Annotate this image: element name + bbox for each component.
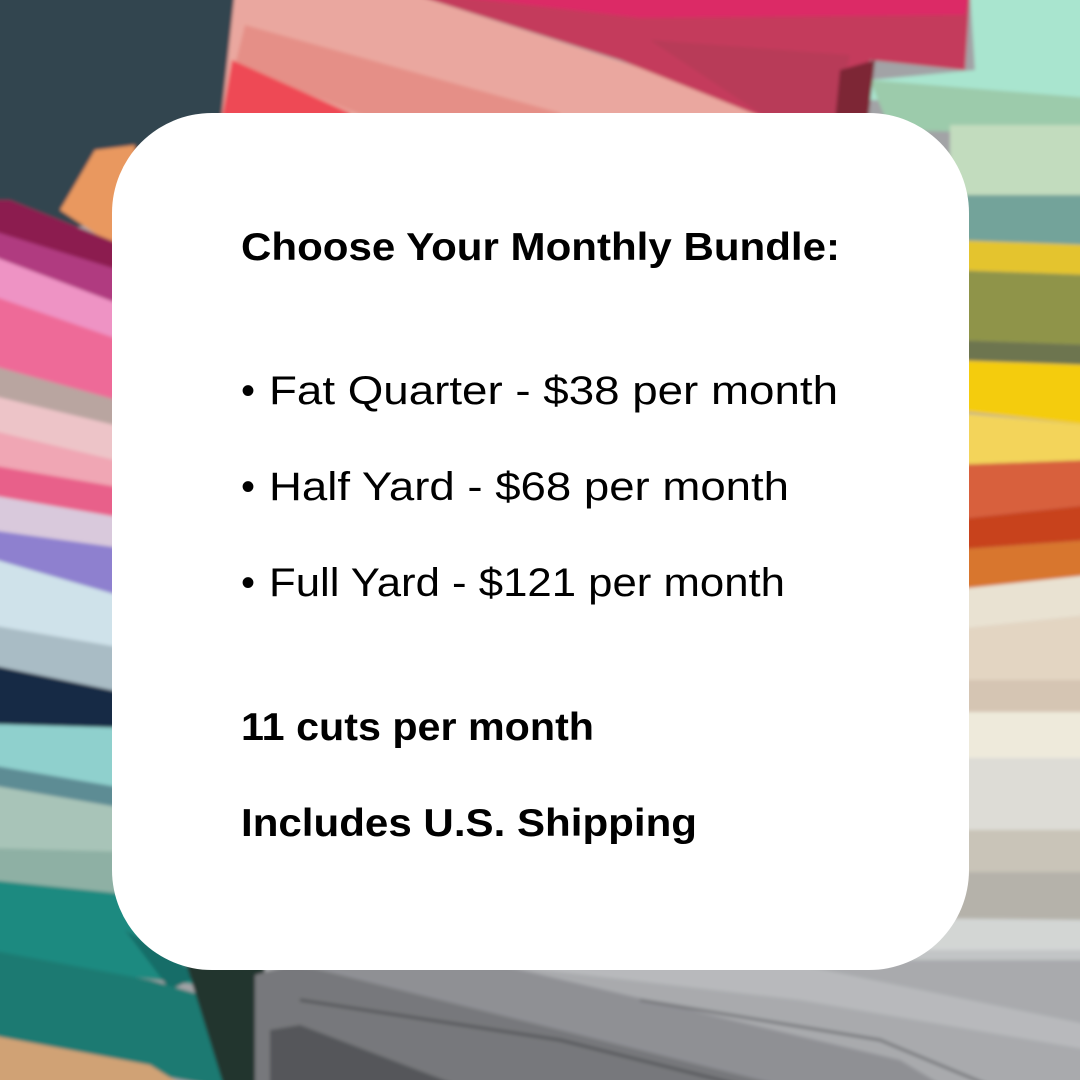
list item: half yard: Half Yard - $68 per month bbox=[269, 465, 789, 509]
heading: Choose Your Monthly Bundle: bbox=[241, 226, 840, 269]
list item: half yard: • bbox=[241, 465, 255, 509]
right bbox=[950, 125, 1080, 200]
list item: fat quarter: Fat Quarter - $38 per month bbox=[269, 369, 838, 413]
cuts per month note: 11 cuts per month bbox=[241, 706, 594, 749]
list item: fat quarter: • bbox=[241, 369, 255, 413]
bottom bbox=[260, 960, 1080, 1080]
top bbox=[0, 0, 235, 230]
left bbox=[60, 145, 135, 260]
list item: full yard: Full Yard - $121 per month bbox=[269, 561, 785, 605]
shipping note: Includes U.S. Shipping bbox=[241, 802, 697, 845]
list item: full yard: • bbox=[241, 561, 255, 605]
